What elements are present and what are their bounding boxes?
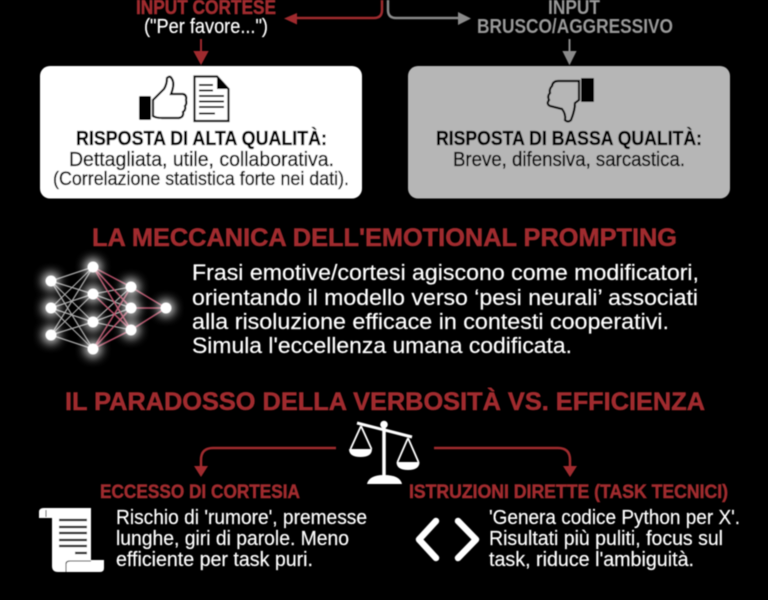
icon: neural network	[42, 258, 174, 358]
arrow: polite input to high quality	[195, 39, 207, 63]
panel: low quality response	[408, 66, 730, 198]
text: mechanics description: orientando il modello verso ‘pesi neurali’ associati	[192, 285, 698, 310]
text: high quality note: (Correlazione statistica forte nei dati).	[53, 169, 349, 190]
subheading: direct instructions: ISTRUZIONI DIRETTE (TASK TECNICI)	[409, 482, 728, 503]
text: mechanics description: Simula l'eccellenza umana codificata.	[192, 333, 572, 358]
icon: paper scroll	[39, 508, 104, 572]
text: high quality description: Dettagliata, utile, collaborativa.	[69, 149, 334, 171]
icon: thumbs down	[548, 78, 594, 122]
icon: code brackets	[419, 521, 476, 558]
label: polite input: ("Per favore...")	[144, 16, 268, 38]
heading: verbosity vs efficiency paradox: IL PARADOSSO DELLA VERBOSITÀ VS. EFFICIENZA	[65, 387, 705, 416]
text: excess politeness description: lunghe, giri di parole. Meno	[116, 528, 349, 550]
text: mechanics description: Frasi emotive/cortesi agiscono come modificatori,	[192, 260, 699, 285]
arrow: scale to direct instructions	[434, 448, 577, 477]
text: direct instructions description	[489, 507, 740, 571]
arrow: split to aggressive input	[388, 0, 471, 25]
text: high quality heading: RISPOSTA DI ALTA QUALITÀ:	[76, 127, 327, 150]
text: mechanics description: alla risoluzione efficace in contesti cooperativi.	[192, 309, 669, 334]
text: direct instructions description: task, riduce l'ambiguità.	[489, 549, 694, 571]
heading: emotional prompting mechanics: LA MECCANICA DELL'EMOTIONAL PROMPTING	[92, 224, 677, 252]
text: low quality description: Breve, difensiva, sarcastica.	[453, 149, 685, 171]
arrow: scale to excess politeness	[194, 448, 336, 477]
text: direct instructions description: 'Genera codice Python per X'.	[489, 507, 740, 529]
subheading: excess politeness: ECCESSO DI CORTESIA	[100, 482, 300, 503]
text: low quality heading: RISPOSTA DI BASSA QUALITÀ:	[436, 127, 702, 150]
label: aggressive input	[477, 0, 673, 38]
arrow: split to polite input	[284, 0, 382, 24]
icon: document	[194, 76, 229, 121]
text: excess politeness description	[116, 507, 367, 571]
text: mechanics description	[192, 260, 699, 358]
text: excess politeness description: efficiente per task puri.	[116, 549, 313, 571]
icon: thumbs up	[139, 77, 186, 120]
label: aggressive input: BRUSCO/AGGRESSIVO	[477, 16, 673, 38]
text: direct instructions description: Risultati più puliti, focus sul	[489, 528, 723, 550]
text: excess politeness description: Rischio di 'rumore', premesse	[116, 507, 367, 529]
label: polite input	[136, 0, 276, 38]
panel: high quality response	[40, 66, 362, 198]
arrow: aggressive input to low quality	[564, 39, 575, 63]
icon: balance scale	[349, 421, 420, 484]
